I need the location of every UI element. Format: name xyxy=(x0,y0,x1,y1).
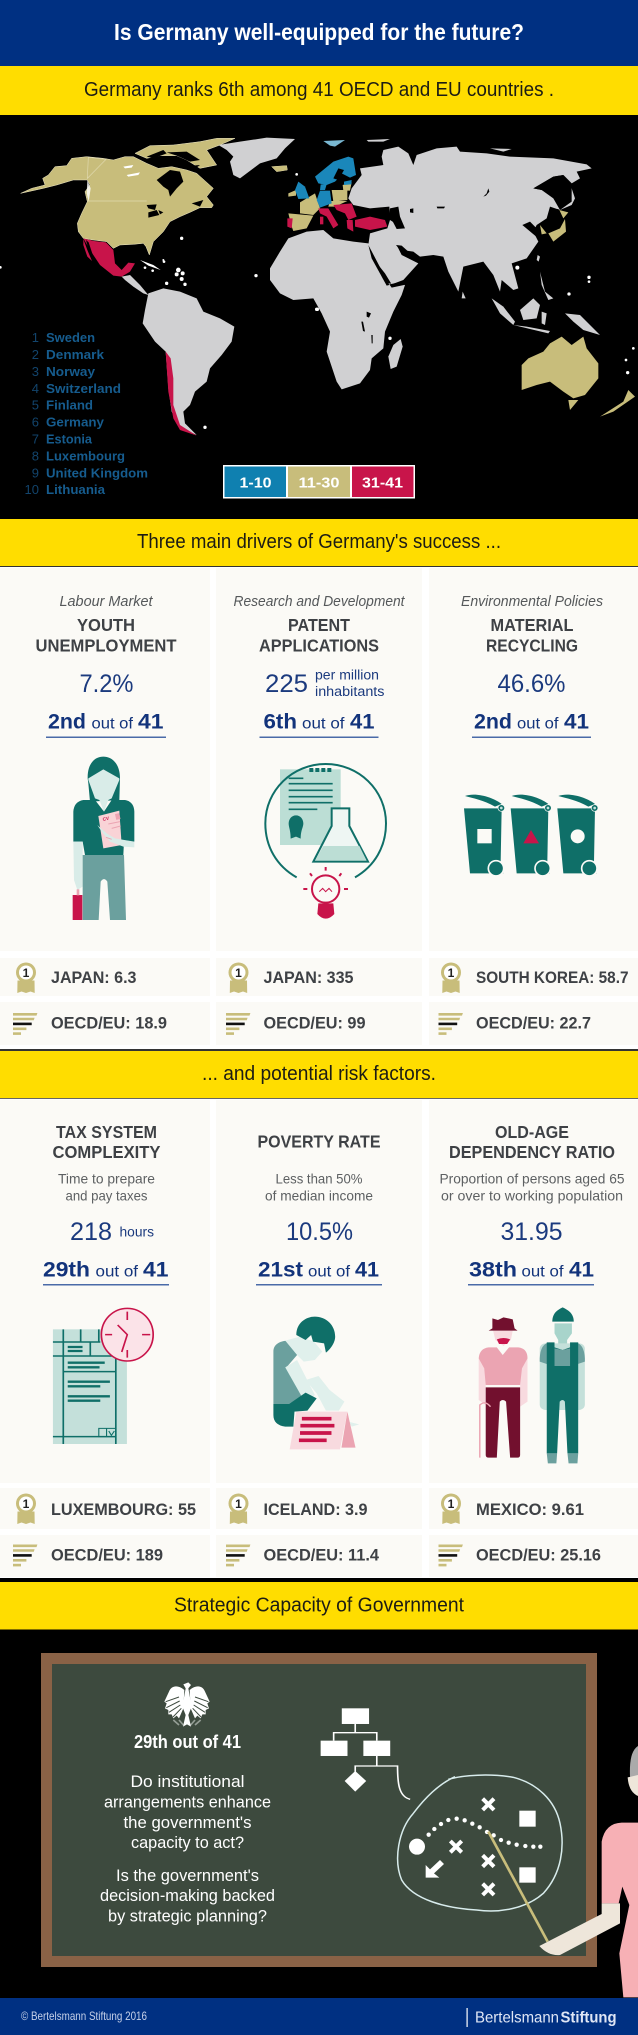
medal row: best performer xyxy=(0,1488,210,1529)
teacher figure with pointer xyxy=(488,1746,638,1997)
indicator heading: COMPLEXITY xyxy=(52,1142,161,1162)
average row xyxy=(216,1002,422,1045)
legend: top ten countries: United Kingdom xyxy=(46,465,148,480)
indicator heading: YOUTH xyxy=(77,615,135,635)
tactics diagram xyxy=(398,1775,562,1911)
medal row: best performer: 1 xyxy=(235,966,242,980)
icon: tax form and clock xyxy=(53,1308,153,1444)
legend: top ten countries: 4 xyxy=(32,381,39,396)
indicator heading: DEPENDENCY RATIO xyxy=(449,1142,615,1162)
question two: decision-making backed xyxy=(100,1887,275,1905)
rank: 41 xyxy=(569,1258,594,1282)
rank: 38th xyxy=(469,1258,517,1282)
legend: top ten countries: Denmark xyxy=(46,347,105,362)
title banner xyxy=(0,0,638,66)
legend: top ten countries: Estonia xyxy=(46,432,93,446)
indicator heading xyxy=(52,1122,161,1162)
legend: top ten countries: 10 xyxy=(25,482,39,497)
medal row: best performer: MEXICO: 9.61 xyxy=(476,1501,584,1519)
average row: OECD/EU: 18.9 xyxy=(51,1014,167,1032)
panel: world map xyxy=(0,115,638,519)
average row xyxy=(0,1002,210,1045)
value: 218 xyxy=(70,1218,112,1246)
legend: top ten countries: Germany xyxy=(46,415,105,430)
medal row: best performer: 1 xyxy=(235,1497,242,1511)
medal row: best performer: SOUTH KOREA: 58.7 xyxy=(476,969,628,987)
rank xyxy=(256,1258,382,1286)
blackboard xyxy=(41,1653,597,1967)
medal row: best performer xyxy=(429,1488,638,1529)
heading: drivers xyxy=(0,519,638,567)
description xyxy=(58,1170,155,1204)
category label: Labour Market xyxy=(60,594,153,610)
indicator heading xyxy=(486,615,578,656)
rank: 2nd xyxy=(48,710,86,734)
medal row: best performer: ICELAND: 3.9 xyxy=(264,1501,368,1519)
value: 46.6% xyxy=(498,670,566,698)
icon: recycling bins xyxy=(464,795,598,876)
question one: the government's xyxy=(124,1814,252,1832)
medal row: best performer xyxy=(216,1488,422,1529)
indicator heading: MATERIAL xyxy=(490,615,574,635)
legend: top ten countries: Norway xyxy=(46,364,96,379)
heading: strategic capacity: Strategic Capacity of Government xyxy=(174,1594,464,1616)
panel: tax system complexity xyxy=(0,1100,210,1577)
heading: overall rank xyxy=(0,66,638,115)
panel: strategic capacity background xyxy=(0,1578,638,1998)
description xyxy=(265,1170,373,1204)
value: hours xyxy=(120,1224,154,1240)
medal row: best performer xyxy=(429,958,638,996)
value: 7.2% xyxy=(80,670,134,698)
average row xyxy=(0,1535,210,1577)
description: Time to prepare xyxy=(58,1170,155,1186)
legend: top ten countries: Sweden xyxy=(46,330,95,345)
question one: capacity to act? xyxy=(131,1834,244,1852)
icon: patent, flask and light bulb xyxy=(265,764,386,919)
average row xyxy=(429,1002,638,1045)
rank: 41 xyxy=(350,710,375,734)
legend: top ten countries xyxy=(25,330,148,497)
value: 225 xyxy=(265,670,308,698)
rank xyxy=(43,1258,169,1286)
value: 10.5% xyxy=(286,1218,353,1246)
medal row: best performer: 1 xyxy=(448,966,455,980)
rank xyxy=(472,710,591,738)
rank: 21st xyxy=(258,1258,303,1282)
average row: OECD/EU: 25.16 xyxy=(476,1546,601,1564)
category label: Research and Development xyxy=(234,594,405,610)
indicator heading: TAX SYSTEM xyxy=(56,1122,157,1142)
legend: top ten countries: 2 xyxy=(32,347,39,362)
description: and pay taxes xyxy=(66,1188,148,1204)
medal row: best performer: 1 xyxy=(448,1497,455,1511)
heading: risk factors xyxy=(0,1049,638,1099)
legend: colour key xyxy=(223,465,415,498)
indicator heading: RECYCLING xyxy=(486,636,578,656)
indicator heading: OLD-AGE xyxy=(495,1122,569,1142)
icon: person sitting with sign xyxy=(273,1317,359,1449)
rank xyxy=(260,710,378,738)
rank: out of xyxy=(302,716,345,732)
question one: arrangements enhance xyxy=(104,1794,271,1812)
medal row: best performer: JAPAN: 6.3 xyxy=(51,969,136,987)
heading: strategic capacity xyxy=(0,1582,638,1630)
heading: overall rank: Germany ranks 6th among 41 OECD and EU countries . xyxy=(84,79,554,101)
logo: Stiftung xyxy=(560,2010,616,2026)
rank: out of xyxy=(522,1264,564,1280)
legend: top ten countries: 5 xyxy=(32,398,39,413)
panel: material recycling xyxy=(429,568,638,1045)
rank: out of xyxy=(517,716,559,732)
average row: OECD/EU: 99 xyxy=(264,1014,366,1032)
value xyxy=(70,1218,154,1246)
legend: top ten countries: 7 xyxy=(32,432,39,446)
description xyxy=(440,1170,625,1204)
rank: 41 xyxy=(138,710,164,734)
world map: Americas xyxy=(0,138,318,436)
description: of median income xyxy=(265,1188,373,1204)
average row: OECD/EU: 22.7 xyxy=(476,1014,591,1032)
description: Less than 50% xyxy=(276,1170,362,1186)
rank: out of xyxy=(96,1264,139,1280)
legend: top ten countries: Luxembourg xyxy=(46,448,125,463)
panel: patent applications xyxy=(216,568,422,1045)
flowchart xyxy=(321,1708,410,1799)
panel: poverty rate xyxy=(216,1100,422,1577)
medal row: best performer xyxy=(216,958,422,996)
medal row: best performer: LUXEMBOURG: 55 xyxy=(51,1501,196,1519)
rank: 41 xyxy=(143,1258,169,1282)
heading: risk factors: ... and potential risk factors. xyxy=(202,1063,436,1085)
medal row: best performer: JAPAN: 335 xyxy=(264,969,354,987)
average row xyxy=(216,1535,422,1577)
rank: 29th xyxy=(43,1258,90,1282)
rank: 41 xyxy=(355,1258,379,1282)
average row xyxy=(429,1535,638,1577)
rank: 41 xyxy=(564,710,589,734)
rank: 6th xyxy=(264,710,297,734)
legend: top ten countries: 1 xyxy=(32,330,39,345)
legend: top ten countries: 6 xyxy=(32,415,39,430)
rank: out of xyxy=(308,1264,351,1280)
value: inhabitants xyxy=(315,684,385,699)
rank: 2nd xyxy=(474,710,512,734)
indicator heading xyxy=(259,615,379,656)
question two: by strategic planning? xyxy=(108,1908,267,1926)
legend: colour key: 11-30 xyxy=(298,476,340,492)
icon: federal eagle xyxy=(164,1682,210,1727)
legend: colour key: 1-10 xyxy=(240,476,272,492)
indicator heading: POVERTY RATE xyxy=(258,1132,380,1152)
description: Proportion of persons aged 65 xyxy=(440,1170,625,1186)
category label: Environmental Policies xyxy=(461,594,603,610)
indicator heading: APPLICATIONS xyxy=(259,636,379,656)
question two: Is the government's xyxy=(116,1867,259,1885)
legend: top ten countries: Lithuania xyxy=(46,482,106,497)
value: 31.95 xyxy=(500,1218,562,1246)
footer xyxy=(0,1998,638,2035)
average row: OECD/EU: 189 xyxy=(51,1546,163,1564)
legend: top ten countries: Finland xyxy=(46,398,93,413)
panel: old-age dependency ratio xyxy=(429,1100,638,1577)
medal row: best performer: 1 xyxy=(23,1497,30,1511)
logo: Bertelsmann xyxy=(475,2010,559,2026)
medal row: best performer: 1 xyxy=(23,966,30,980)
average row: OECD/EU: 11.4 xyxy=(264,1546,380,1564)
question two xyxy=(100,1867,275,1926)
indicator heading xyxy=(449,1122,615,1162)
legend: top ten countries: 9 xyxy=(32,465,39,480)
legend: top ten countries: Switzerland xyxy=(46,381,121,396)
icon: young woman with CV xyxy=(73,757,134,920)
world map: Europe, Africa, Asia and Oceania xyxy=(270,139,635,417)
logo xyxy=(466,2008,616,2027)
rank xyxy=(468,1258,594,1286)
copyright: © Bertelsmann Stiftung 2016 xyxy=(21,2009,147,2023)
indicator heading xyxy=(36,615,177,656)
legend: colour key: 31-41 xyxy=(362,476,403,492)
description: or over to working population xyxy=(441,1188,623,1204)
value: per million xyxy=(315,668,379,682)
icon: elderly man and worker xyxy=(479,1307,585,1463)
medal row: best performer xyxy=(0,958,210,996)
rank xyxy=(46,710,166,738)
title banner: Is Germany well-equipped for the future? xyxy=(114,19,524,45)
question one xyxy=(104,1773,271,1852)
legend: top ten countries: 8 xyxy=(32,448,39,463)
indicator heading: PATENT xyxy=(288,615,350,635)
legend: top ten countries: 3 xyxy=(32,364,39,379)
heading: drivers: Three main drivers of Germany's success ... xyxy=(137,531,501,553)
question one: Do institutional xyxy=(130,1773,244,1791)
value xyxy=(265,668,385,699)
rank: 29th out of 41 xyxy=(134,1732,241,1752)
indicator heading: UNEMPLOYMENT xyxy=(36,636,177,656)
icon: young woman with CV: CV xyxy=(102,816,110,822)
rank: out of xyxy=(92,716,134,732)
panel: youth unemployment xyxy=(0,568,210,1045)
